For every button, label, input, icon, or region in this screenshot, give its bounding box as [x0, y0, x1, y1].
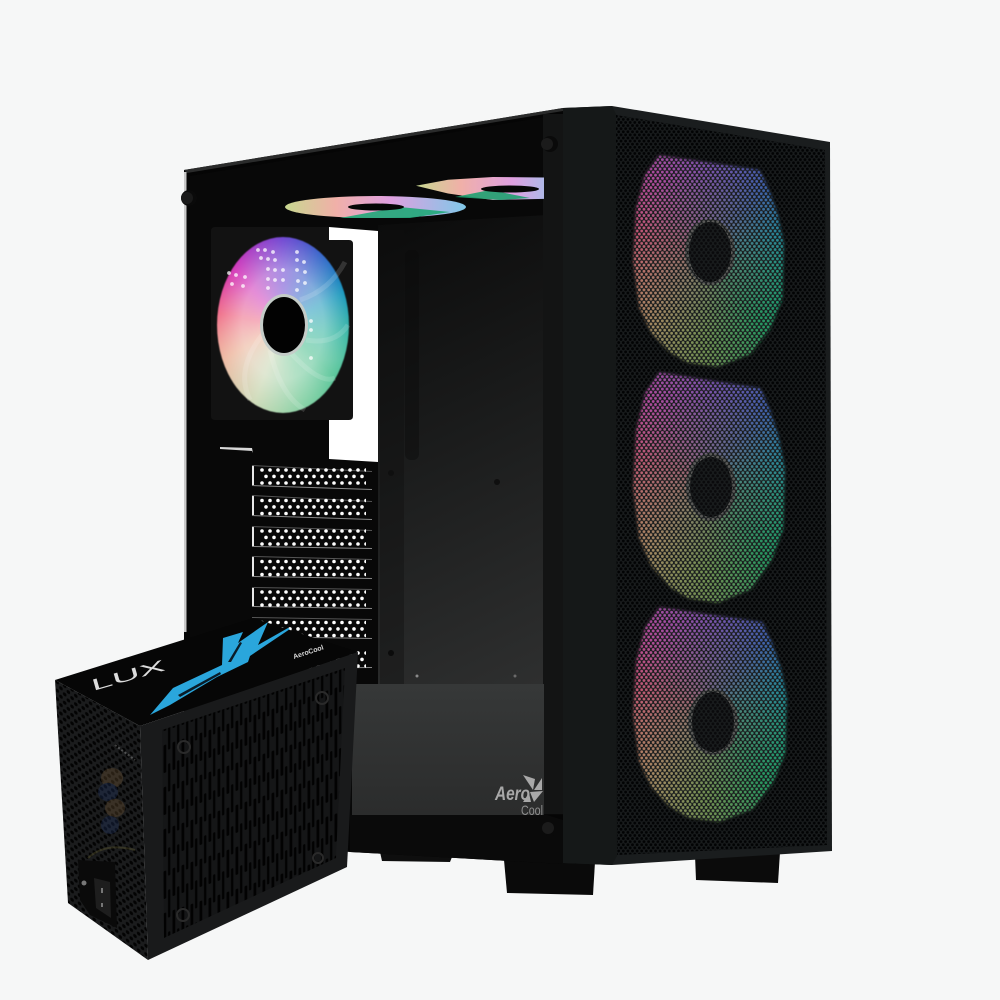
PSU vent face — [140, 652, 358, 960]
fan frame — [211, 227, 353, 420]
logo: AeroCool on glass — [494, 775, 543, 818]
fan hub: front middle — [686, 453, 736, 521]
power supply — [55, 618, 358, 960]
case feet — [380, 852, 780, 895]
PSU top logo: Lux: LUX — [89, 657, 168, 695]
fan wheel — [217, 237, 349, 413]
PSU top logo: brand: AeroCool — [292, 644, 325, 661]
logo text: Aero — [494, 784, 530, 805]
PSU corner screws — [177, 692, 328, 921]
slot 5 — [252, 587, 372, 609]
fan blades — [245, 262, 348, 410]
PSU coloured cables behind mesh — [88, 745, 135, 858]
PCI slot covers — [220, 447, 372, 669]
logo pinwheel — [523, 775, 543, 802]
slot 1 — [252, 465, 372, 490]
PSU power socket — [78, 860, 117, 928]
PC case — [181, 106, 832, 895]
fan hub — [260, 294, 308, 356]
panel: front frame — [563, 106, 832, 865]
fan hub: front bottom — [688, 689, 738, 755]
fan: rear RGB fan — [211, 227, 353, 420]
fan: front top — [633, 155, 784, 367]
fan: front bottom — [633, 607, 787, 822]
panel: case interior back plate — [378, 114, 563, 814]
slot 6 — [252, 617, 372, 640]
white mesh glints — [227, 248, 313, 360]
fan hub: front top — [685, 219, 735, 285]
fan: front middle — [633, 372, 785, 603]
fan: top fan left — [285, 196, 466, 218]
fan: top fan right — [416, 177, 544, 200]
slot 2 — [252, 495, 372, 520]
front mesh sheet — [616, 115, 827, 855]
slot 7 — [252, 650, 372, 669]
PSU side mesh — [55, 680, 148, 960]
panel: front mesh underlay — [616, 115, 827, 855]
glass screws — [181, 136, 558, 836]
slot 3 — [252, 526, 372, 549]
PSU top face — [55, 618, 358, 726]
panel: side glass — [184, 108, 563, 864]
panel: PSU shroud — [350, 684, 563, 864]
logo second word: Cool — [521, 802, 543, 818]
slot 4 — [252, 556, 372, 579]
rear cutout in white — [329, 227, 378, 462]
PSU top logo: blue streak — [150, 622, 290, 715]
